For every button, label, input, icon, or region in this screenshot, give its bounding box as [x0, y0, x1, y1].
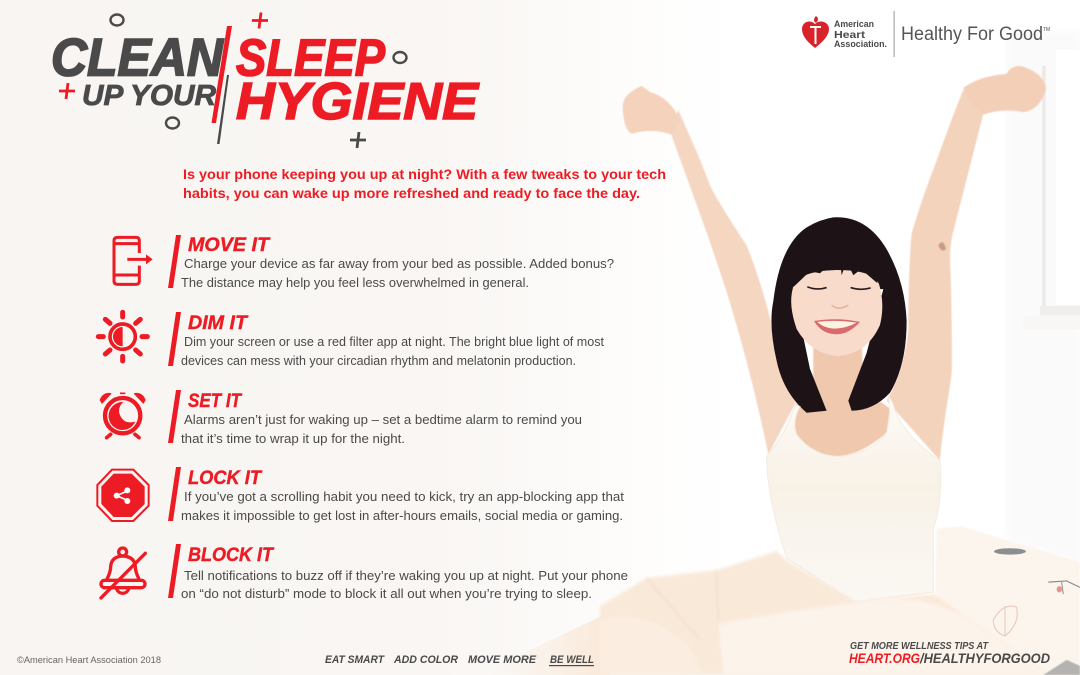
website call to action: GET MORE WELLNESS TIPS AT: [850, 641, 989, 652]
intro text: [183, 167, 666, 201]
right arm: [887, 90, 983, 461]
body: Tell notifications to buzz off if they’re waking you up at night. Put your phone: [184, 568, 628, 583]
website call to action: /HEALTHYFORGOOD: [919, 650, 1050, 666]
hair: [771, 217, 907, 413]
footer corner shadow: [1043, 660, 1080, 675]
logo: American Heart Association: [802, 11, 1050, 57]
body: Charge your device as far away from your bed as possible. Added bonus?: [184, 256, 614, 271]
title: sleep hygiene: HYGIENE: [236, 73, 479, 131]
footer navigation: EAT SMART: [325, 654, 385, 666]
title: [51, 12, 479, 148]
title: clean up your: UP YOUR: [82, 80, 216, 112]
logo text: American: [834, 19, 874, 29]
body: devices can mess with your circadian rhythm and melatonin production.: [181, 353, 576, 368]
title: clean up your: CLEAN: [51, 28, 225, 88]
title: clean up your: [51, 28, 225, 112]
body: Dim your screen or use a red filter app at night. The bright blue light of most: [184, 334, 604, 349]
fist: right: [963, 66, 1046, 115]
skin: arms and fists: [623, 66, 1046, 461]
footer navigation: MOVE MORE: [468, 654, 537, 666]
body: If you’ve got a scrolling habit you need to kick, try an app-blocking app that: [184, 489, 624, 504]
body: makes it impossible to get lost in after-hours emails, social media or gaming.: [181, 508, 623, 523]
photo: woman stretching in bed: [600, 30, 1080, 675]
body: that it’s time to wrap it up for the night.: [181, 431, 405, 446]
eyes: [807, 287, 871, 289]
icon: alarm clock with moon: [100, 393, 145, 438]
icon: phone with arrow: [114, 237, 153, 284]
logo text: Association.: [834, 39, 887, 49]
heading: MOVE IT: [188, 235, 270, 256]
tip: dim it: [98, 312, 604, 368]
tip: set it: [100, 390, 582, 446]
website call to action: [849, 641, 1050, 666]
title: sleep hygiene: SLEEP: [236, 30, 385, 88]
copyright: ©American Heart Association 2018: [17, 655, 161, 666]
fist: left: [623, 86, 680, 135]
bed sheet right: [933, 526, 1080, 675]
icon: stop sign with share symbol: [97, 470, 149, 521]
mouth: [814, 319, 860, 334]
heading: BLOCK IT: [188, 545, 274, 566]
blanket fade at the lower left of the photo: [480, 612, 610, 675]
footer navigation: BE WELL: [550, 654, 594, 666]
neck and chest: [793, 341, 890, 457]
nose: [832, 305, 848, 308]
face: [791, 270, 882, 356]
tip: move it: [114, 235, 614, 290]
title: sleep hygiene: [236, 30, 479, 131]
footer navigation: [325, 654, 594, 666]
sheet print: [993, 548, 1080, 636]
body: Alarms aren’t just for waking up – set a bedtime alarm to remind you: [184, 412, 582, 427]
logo text: Heart: [834, 30, 866, 41]
white tank top: [767, 395, 941, 602]
body: on “do not disturb” mode to block it all out when you’re trying to sleep.: [181, 586, 592, 601]
left arm: [671, 110, 797, 455]
body: [181, 256, 614, 290]
body: [181, 568, 628, 601]
body: [181, 489, 624, 523]
tip: block it: [101, 544, 628, 601]
body: The distance may help you feel less overwhelmed in general.: [181, 275, 529, 290]
heading: SET IT: [188, 391, 242, 412]
icon: heart and torch: [802, 16, 829, 48]
heading: LOCK IT: [188, 468, 262, 489]
healthy for good: Healthy For Good: [901, 24, 1043, 45]
icon: crossed-out bell: [101, 548, 145, 598]
body: [181, 412, 582, 446]
heading: DIM IT: [188, 313, 248, 334]
tip: lock it: [97, 467, 624, 523]
window frame: [1007, 30, 1080, 564]
logo text: [834, 19, 887, 49]
title slashes: [212, 26, 232, 144]
footer navigation: ADD COLOR: [393, 654, 458, 666]
intro text: Is your phone keeping you up at night? With a few tweaks to your tech: [183, 167, 666, 182]
bangs: [793, 223, 877, 287]
body: [181, 334, 604, 368]
intro text: habits, you can wake up more refreshed and ready to face the day.: [183, 186, 640, 201]
blanket: [600, 551, 1050, 675]
icon: half sun: [98, 312, 147, 361]
logo: American Heart Association: TM: [1043, 27, 1050, 33]
website call to action: HEART.ORG: [849, 650, 920, 666]
title decorations: [59, 12, 406, 148]
